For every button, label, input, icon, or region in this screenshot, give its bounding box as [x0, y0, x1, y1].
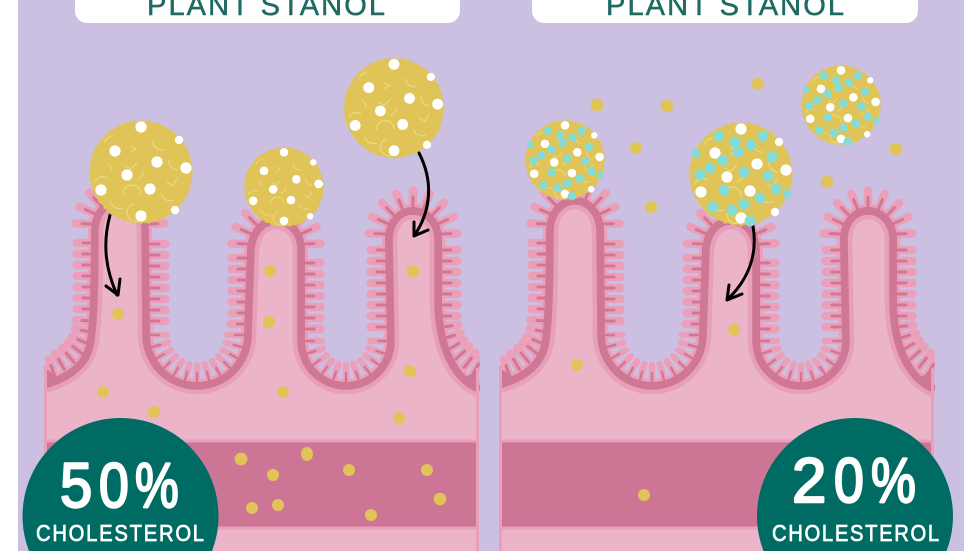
badge value 20%: 2 — [792, 446, 826, 516]
badge: 50% cholesterol — [22, 418, 218, 551]
micelle: left large — [90, 121, 192, 223]
badge value 20%: % — [871, 446, 916, 516]
right cholesterol dots — [571, 78, 902, 501]
right title box — [532, 0, 918, 23]
micelle: left upper — [345, 59, 443, 157]
badge value 50%: % — [135, 450, 179, 520]
left title box — [75, 0, 460, 23]
micelle with stanol: right small — [526, 121, 604, 200]
micelle with stanol: right large — [690, 123, 792, 226]
arrow: left villus — [106, 215, 120, 295]
left cholesterol dots — [97, 265, 446, 521]
badge value 20%: 0 — [834, 446, 864, 516]
badge label: CHOLESTEROL — [772, 520, 939, 546]
micelle: left small — [245, 148, 323, 226]
badge value 50%: 0 — [99, 451, 129, 521]
micelle with stanol: right upper — [802, 66, 880, 145]
badge value 50%: 5 — [60, 450, 92, 521]
badge value 20% — [792, 446, 916, 516]
right intestinal villi tissue — [500, 180, 937, 551]
left intestinal villi tissue — [45, 180, 482, 551]
badge value 50% — [60, 450, 179, 521]
arrow: third villus — [414, 153, 429, 236]
badge: 20% cholesterol — [757, 418, 953, 551]
badge label: CHOLESTEROL — [36, 520, 204, 546]
arrow: right panel villus — [727, 226, 754, 300]
